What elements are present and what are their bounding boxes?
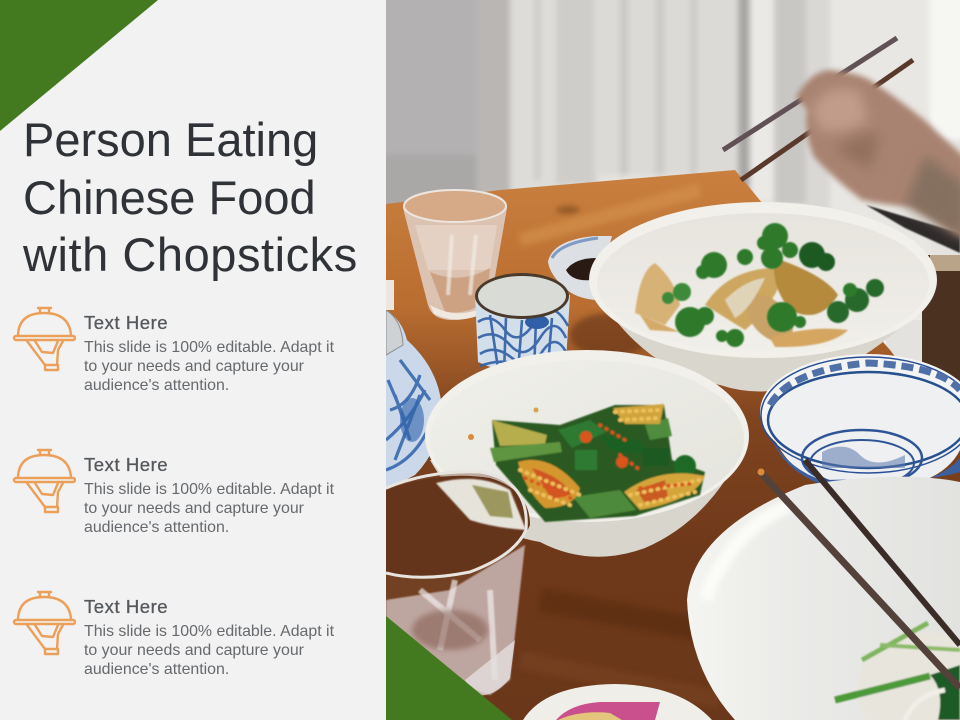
item body text: This slide is 100% editable. Adapt it [84, 623, 334, 640]
item body text [84, 339, 334, 394]
small sauce dish [548, 236, 612, 300]
pink patterned dish, bottom [523, 684, 712, 720]
item body text: audience's attention. [84, 519, 229, 536]
dark area behind the table at right [866, 205, 960, 385]
item body text [84, 481, 334, 536]
large white plate, lower right [687, 477, 960, 720]
tea cup, blue and white [475, 273, 570, 372]
clear water glass, top [403, 189, 507, 320]
noodles and scallions [835, 623, 960, 720]
decorative triangle: bottom green [386, 616, 512, 720]
item body text: This slide is 100% editable. Adapt it [84, 339, 334, 356]
decorative triangle: top-left green [0, 0, 158, 131]
item heading: Text Here [84, 312, 168, 333]
teapot, blue and white [386, 280, 442, 490]
item body text: to your needs and capture your [84, 358, 304, 375]
item heading: Text Here [84, 454, 168, 475]
title: Person Eating [23, 113, 318, 166]
dumplings [635, 258, 848, 347]
title [23, 113, 358, 281]
icon: serving cloche on hand [12, 590, 76, 656]
icon: serving cloche on hand [12, 448, 76, 514]
item 2 [12, 448, 334, 536]
chopsticks resting on plate [758, 460, 960, 688]
salad mound [490, 404, 705, 522]
item body text: to your needs and capture your [84, 500, 304, 517]
item body text: to your needs and capture your [84, 642, 304, 659]
hand holding chopsticks [723, 38, 960, 240]
cucumber salad bowl [425, 350, 749, 557]
front water glass [386, 472, 530, 697]
item body text: audience's attention. [84, 377, 229, 394]
background wall and curtain [370, 0, 960, 320]
title: with Chopsticks [23, 228, 358, 281]
item body text [84, 623, 334, 678]
photo: table with Chinese food and a hand holding chopsticks [386, 0, 960, 720]
cilantro [662, 223, 884, 347]
item 1 [12, 306, 334, 394]
rice bowl, blue and white [760, 354, 960, 486]
title: Chinese Food [23, 170, 316, 224]
wooden table [386, 170, 960, 720]
item body text: audience's attention. [84, 661, 229, 678]
item heading: Text Here [84, 596, 168, 617]
icon: serving cloche on hand [12, 306, 76, 372]
dumpling bowl, large [589, 202, 937, 392]
item body text: This slide is 100% editable. Adapt it [84, 481, 334, 498]
item 3 [12, 590, 334, 678]
